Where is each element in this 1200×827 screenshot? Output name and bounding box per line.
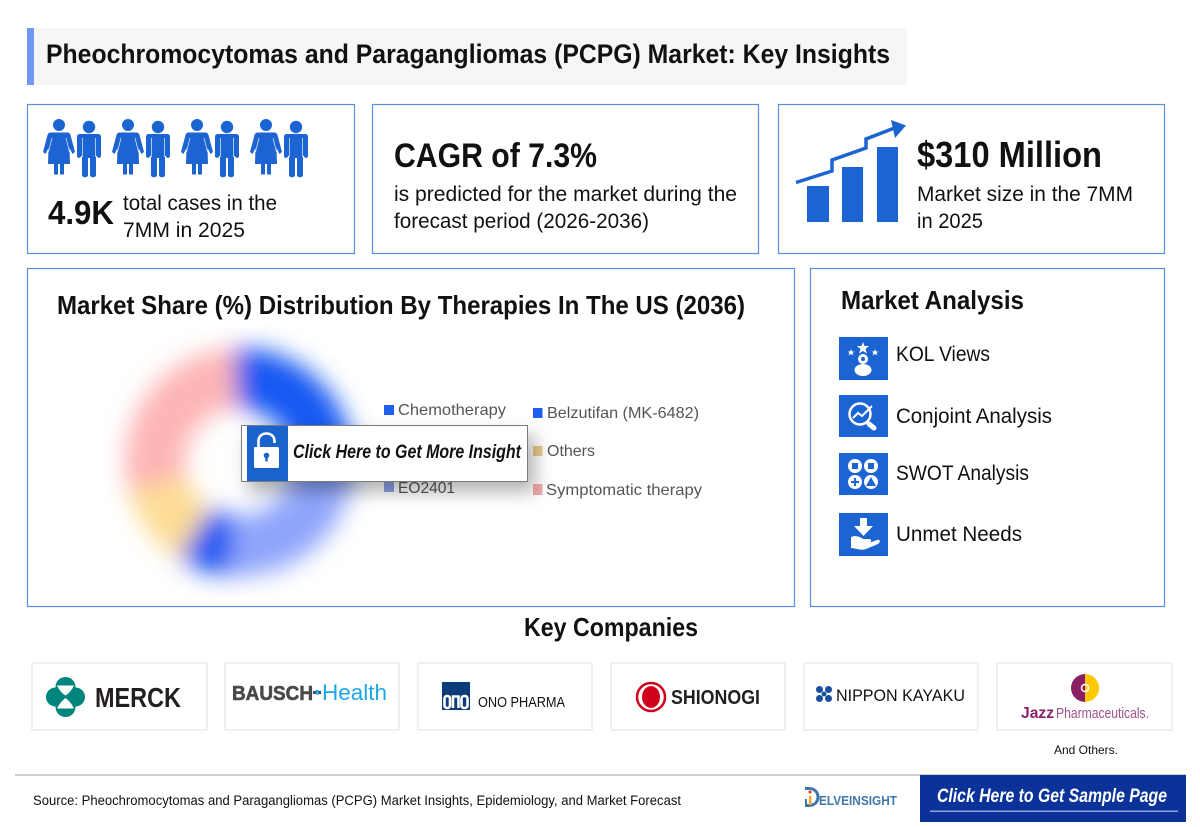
logo: Merck <box>32 663 207 730</box>
legend: Symptomatic therapy <box>546 482 702 499</box>
logo: Jazz Pharmaceuticals: Jazz <box>1021 705 1054 722</box>
logo: Nippon Kayaku <box>804 663 978 730</box>
button: more insight <box>242 426 528 482</box>
text: market size description <box>917 183 1133 233</box>
text: total cases <box>123 192 277 242</box>
logo: Ono Pharma: ONO PHARMA <box>478 694 565 711</box>
stat: market size: $310 Million <box>917 134 1102 175</box>
logo: Ono Pharma <box>418 663 592 730</box>
legend: Others <box>547 443 595 460</box>
legend: Belzutifan (MK-6482) <box>547 405 699 422</box>
footer <box>15 774 1186 822</box>
text: CAGR description: forecast period (2026-2036) <box>394 210 649 233</box>
panel: market analysis <box>810 268 1164 606</box>
text: market size description: Market size in the 7MM <box>917 183 1133 206</box>
stat: 4.9K: 4.9K <box>48 194 114 231</box>
icon: growth chart <box>796 120 906 222</box>
panel: market share chart <box>28 268 794 606</box>
heading: market share: Market Share (%) Distribution By Therapies In The US (2036) <box>57 290 745 320</box>
text: CAGR description <box>394 183 737 233</box>
heading: key companies: Key Companies <box>524 612 698 642</box>
legend <box>384 402 702 499</box>
panel: market size <box>778 104 1164 254</box>
panel: total cases <box>28 104 354 254</box>
text: market size description: in 2025 <box>917 210 983 233</box>
text: total cases: total cases in the <box>123 192 277 215</box>
logo: Bausch Health: BAUSCH <box>232 683 313 705</box>
heading: market analysis: Market Analysis <box>841 285 1024 315</box>
logo: Jazz Pharmaceuticals <box>997 663 1172 730</box>
logo: DelveInsight: ELVEINSIGHT <box>819 793 897 808</box>
logo: Bausch Health <box>225 663 399 730</box>
stat: CAGR: CAGR of 7.3% <box>394 137 597 175</box>
item: KOL views: KOL Views <box>896 343 990 366</box>
text: and others: And Others. <box>1054 743 1118 757</box>
icon: people <box>43 119 308 177</box>
title: Pheochromocytomas and Paragangliomas (PCPG) Market: Key Insights <box>46 39 890 69</box>
title <box>27 28 907 85</box>
logo: DelveInsight <box>805 788 897 808</box>
item: conjoint analysis: Conjoint Analysis <box>896 405 1052 428</box>
logo: Nippon Kayaku: NIPPON KAYAKU <box>836 686 965 705</box>
text: CAGR description: is predicted for the market during the <box>394 183 737 206</box>
icon: open lock <box>254 434 279 468</box>
logo: Shionogi: SHIONOGI <box>671 687 760 709</box>
button: more insight: Click Here to Get More Insight <box>293 442 522 463</box>
logo: Bausch Health: Health <box>322 680 387 705</box>
logo: Merck: MERCK <box>95 682 181 713</box>
text: source: Source: Pheochromocytomas and Paragangliomas (PCPG) Market Insights, Epidemiology, and Market Forecast <box>33 793 681 808</box>
panel: CAGR <box>372 104 758 254</box>
logo: Jazz Pharmaceuticals: Pharmaceuticals. <box>1056 705 1149 722</box>
item: KOL views <box>839 337 990 380</box>
item: unmet needs: Unmet Needs <box>896 523 1022 546</box>
logo: Shionogi <box>611 663 785 730</box>
item: unmet needs <box>839 513 1022 556</box>
item: conjoint analysis <box>839 395 1052 437</box>
legend: Chemotherapy <box>398 402 506 419</box>
item: SWOT analysis: SWOT Analysis <box>896 462 1029 485</box>
legend: EO2401 <box>398 480 455 497</box>
button: sample page <box>920 775 1186 822</box>
text: total cases: 7MM in 2025 <box>123 219 245 242</box>
donut chart (blurred) <box>152 375 326 549</box>
item: SWOT analysis <box>839 453 1029 495</box>
